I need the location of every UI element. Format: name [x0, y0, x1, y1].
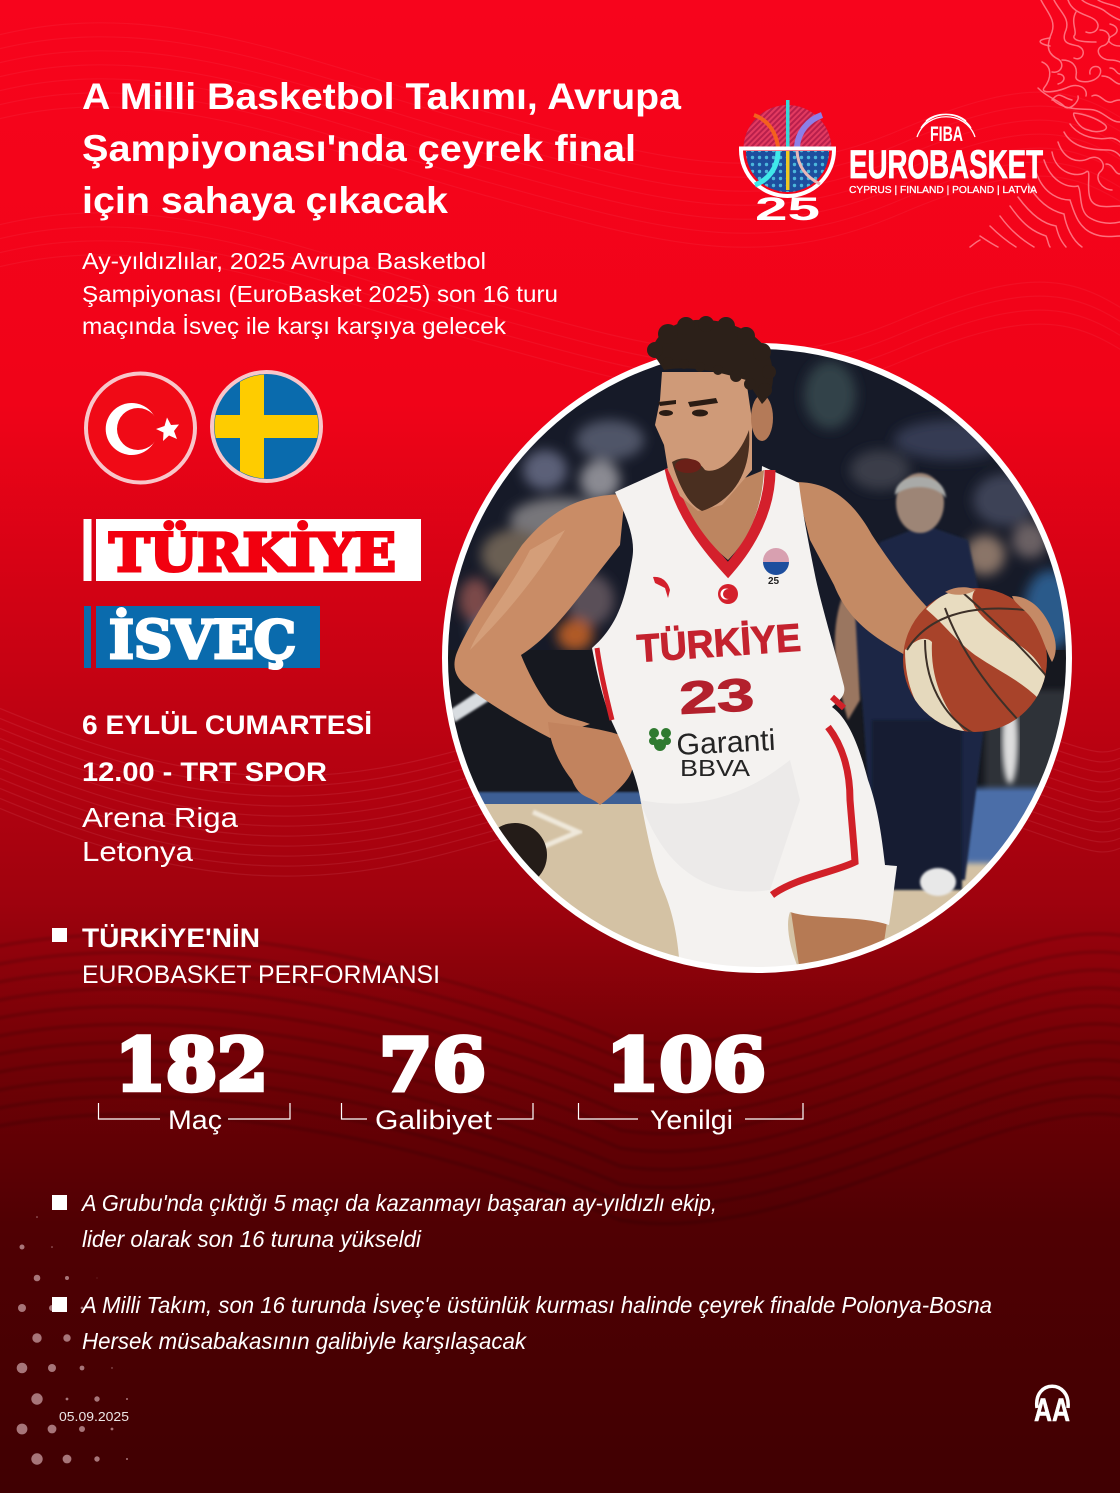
stat: matches: 182 [115, 1022, 268, 1107]
icon: AA logo [1034, 1386, 1070, 1428]
player photo circle: 25 [768, 576, 780, 587]
photo: basketball [903, 588, 1048, 740]
match info: Arena Riga [82, 802, 238, 833]
logo number 25: 25 [755, 191, 820, 227]
flag: Türkiye [86, 374, 195, 482]
title [82, 76, 681, 221]
photo: right arm [795, 482, 930, 655]
curly hair [647, 316, 776, 404]
jersey collar [670, 468, 770, 570]
performance heading [52, 923, 440, 989]
FIBA wordmark: FIBA [930, 123, 963, 146]
jersey text: TÜRKİYE [636, 617, 802, 671]
photo: right leg [791, 912, 887, 964]
jersey crest [718, 584, 738, 604]
jersey puma logo [653, 577, 670, 598]
jersey tournament badge [763, 548, 789, 564]
host countries: CYPRUS | FINLAND | POLAND | LATVIA [849, 185, 1037, 196]
bullet [52, 928, 67, 942]
stat: losses [578, 1022, 803, 1135]
sponsor text bbva: BBVA [680, 755, 751, 781]
note: quarter final: A Milli Takım, son 16 turunda İsveç'e üstünlük kurması halinde çeyrek finalde Polonya-Bosna [80, 1292, 992, 1318]
photo: ring [445, 346, 1069, 970]
performance heading: TÜRKİYE'NİN [82, 923, 260, 953]
beard [672, 430, 749, 511]
player head [647, 316, 776, 511]
title: için sahaya çıkacak [82, 180, 448, 221]
date: 05.09.2025 [59, 1409, 129, 1424]
FIBA arcs [917, 114, 975, 137]
subtitle: maçında İsveç ile karşı karşıya gelecek [82, 313, 507, 339]
match info: 6 EYLÜL CUMARTESİ [82, 710, 372, 740]
title: Şampiyonası'nda çeyrek final [82, 128, 636, 169]
subtitle [82, 248, 558, 339]
performance heading: EUROBASKET PERFORMANSI [82, 961, 440, 989]
note: quarter final: Hersek müsabakasının galibiyle karşılaşacak [82, 1328, 527, 1354]
photo: hand on ball [945, 587, 1056, 662]
sponsor clover [649, 728, 671, 751]
stat: wins: Galibiyet [375, 1105, 493, 1135]
bullet [52, 1195, 67, 1210]
note: quarter final [52, 1292, 992, 1354]
subtitle: Şampiyonası (EuroBasket 2025) son 16 turu [82, 281, 558, 307]
title: A Milli Basketbol Takımı, Avrupa [82, 76, 681, 117]
jersey number: 23 [678, 668, 755, 724]
eyes [658, 398, 718, 416]
match info: 12.00 - TRT SPOR [82, 757, 327, 787]
note: group stage: A Grubu'nda çıktığı 5 maçı da kazanmayı başaran ay-yıldızlı ekip, [80, 1190, 717, 1216]
dot pattern [17, 1216, 128, 1465]
stat: wins [342, 1022, 533, 1135]
photo: jersey and shorts [592, 466, 897, 972]
maze pattern top right [970, 0, 1120, 247]
shorts red stripes [597, 648, 855, 895]
sponsor text: Garanti [676, 724, 776, 762]
EuroBasket logo [739, 100, 1043, 227]
neck [676, 470, 764, 560]
player photo circle [440, 340, 1080, 980]
photo: arena background [440, 340, 1080, 980]
team label: Sweden: İSVEÇ [109, 608, 296, 671]
note: group stage: lider olarak son 16 turuna yükseldi [82, 1226, 422, 1252]
stat: matches: Maç [168, 1105, 222, 1135]
subtitle: Ay-yıldızlılar, 2025 Avrupa Basketbol [82, 248, 486, 274]
photo: hand [548, 722, 632, 805]
stat: losses: 106 [606, 1022, 766, 1107]
arm highlight [470, 530, 565, 650]
photo: left arm [454, 494, 625, 738]
icon: basketball bowl [739, 100, 836, 196]
flag: Sweden [210, 370, 323, 483]
stat: matches [98, 1022, 290, 1135]
jersey shading [640, 770, 778, 892]
note: group stage [52, 1190, 717, 1252]
ear [751, 395, 773, 441]
match info: Letonya [82, 836, 193, 867]
stat: losses: Yenilgi [650, 1105, 733, 1135]
match info [82, 710, 372, 867]
photo: coach [835, 473, 990, 896]
mouth [675, 459, 701, 473]
bullet [52, 1297, 67, 1312]
stat: wins: 76 [379, 1022, 486, 1107]
team label: Türkiye: TÜRKİYE [109, 521, 396, 584]
icon: AA logo: AA [1034, 1392, 1070, 1428]
